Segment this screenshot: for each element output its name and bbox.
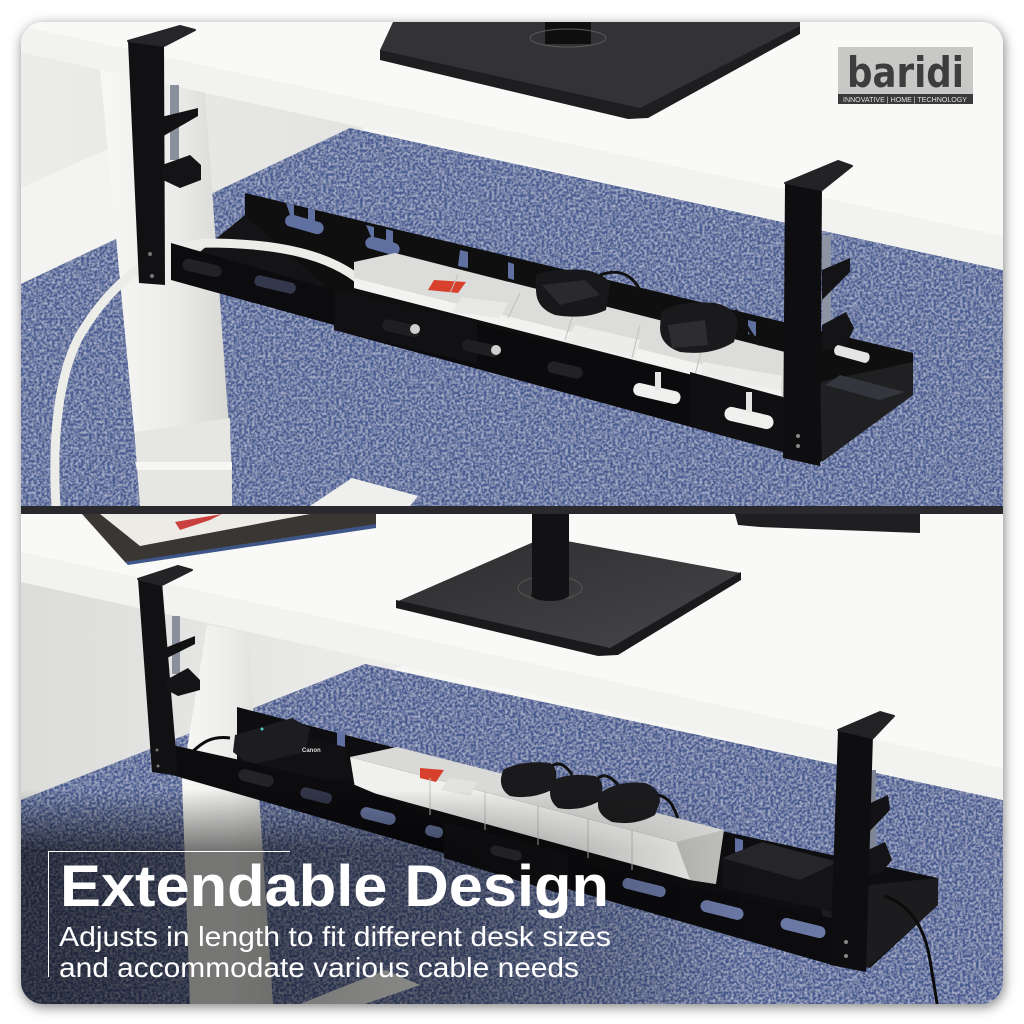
front plate slots [237, 768, 827, 939]
power strip [354, 253, 785, 398]
dark text overlay [21, 790, 741, 1004]
monitor stand base [380, 22, 800, 119]
white desk leg [100, 68, 418, 506]
back wall slots [285, 203, 756, 336]
white desk leg [182, 625, 420, 1004]
organizer front plates [172, 745, 832, 965]
white mains cable [55, 243, 362, 506]
threaded clamp rod, right [822, 235, 870, 363]
threaded clamp rod, right [869, 770, 892, 867]
panel divider [21, 506, 1003, 514]
right vertical bracket [783, 161, 852, 466]
black plug 2 [660, 302, 760, 353]
black cable, right [884, 896, 937, 1004]
text block frame [48, 852, 290, 977]
power strip [350, 747, 724, 884]
power adapter and Canon charger: Canon [302, 748, 321, 754]
black plug 2 [550, 775, 618, 809]
panel: bottom photo, extended organizer [21, 514, 1003, 1004]
organizer back wall [190, 193, 913, 463]
subtitle line 2: and accommodate various cable needs [59, 952, 579, 983]
right vertical bracket [830, 712, 894, 972]
power adapter and Canon charger [192, 718, 320, 764]
blue carpet floor [21, 128, 1003, 506]
black plug 1 [501, 762, 572, 797]
subtitle line 1: Adjusts in length to fit different desk sizes [59, 921, 611, 952]
panel: top photo, retracted organizer [21, 22, 1003, 506]
organizer front plates [171, 243, 783, 452]
white desk top [21, 560, 1003, 800]
wall behind desk [21, 582, 402, 800]
black plug 1 [536, 270, 640, 317]
left vertical bracket [128, 26, 201, 285]
logo: baridi: INNOVATIVE | HOME | TECHNOLOGY [843, 97, 967, 104]
blue carpet floor [21, 664, 1003, 1004]
front plate slots [181, 258, 775, 430]
logo: baridi: baridi [847, 48, 964, 97]
skirting board [62, 150, 116, 262]
monitor underside [735, 514, 920, 533]
black plug 3 [598, 782, 678, 823]
monitor stand [396, 514, 741, 656]
white desk top [21, 22, 1003, 270]
notebook on desk [82, 514, 376, 565]
wall behind desk [21, 52, 364, 284]
left vertical bracket [138, 566, 200, 776]
title: Extendable Design [60, 854, 609, 919]
organizer back wall [237, 707, 938, 968]
black power brick [722, 842, 838, 912]
